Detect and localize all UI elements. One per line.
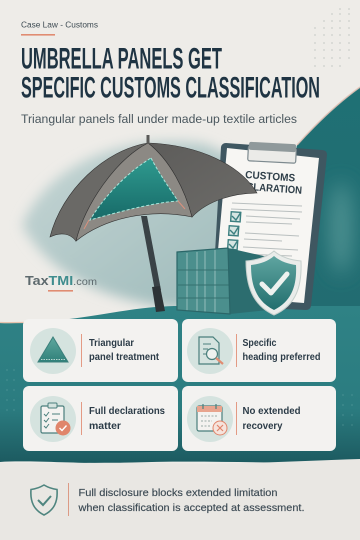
canopy middle panel	[76, 143, 192, 241]
label: Full declarations	[89, 406, 165, 417]
label: recovery	[242, 421, 283, 432]
checklist lines	[231, 203, 302, 256]
canopy right panel	[148, 143, 257, 217]
clipboard heading: DECLARATION	[233, 180, 302, 197]
panel: full declarations matter	[23, 386, 178, 451]
title	[21, 42, 320, 104]
label: matter	[89, 421, 121, 432]
panel stitching	[90, 158, 178, 220]
icon: triangle	[38, 337, 68, 362]
umbrella illustration	[50, 135, 257, 312]
subtitle: Triangular panels fall under made-up textile articles	[21, 112, 297, 126]
label: Specific	[242, 338, 277, 349]
dot pattern top right	[314, 8, 350, 67]
label: Triangular	[89, 338, 134, 349]
dots on teal	[6, 369, 353, 426]
teal wave background	[0, 87, 360, 463]
triangular teal panel	[90, 158, 178, 220]
footer callout text: Full disclosure blocks extended limitation	[78, 487, 278, 499]
icon: calendar cross	[197, 404, 227, 435]
clipboard illustration	[212, 142, 327, 310]
canopy left panel	[50, 143, 148, 241]
clipboard heading	[233, 169, 302, 197]
footer strip	[0, 459, 360, 540]
shield check	[246, 251, 301, 315]
label: No extended	[242, 406, 300, 417]
checkboxes	[228, 212, 241, 250]
label: heading preferred	[242, 352, 320, 363]
panel: triangular panel treatment	[23, 319, 178, 382]
icon: document magnifier	[199, 337, 223, 364]
accent rule	[21, 34, 55, 36]
shipping container	[177, 248, 268, 314]
logo: TaxTMI.com: TaxTMI.com	[25, 273, 97, 288]
watercolor wash behind umbrella	[22, 142, 240, 308]
umbrella pole	[141, 216, 161, 291]
clipboard heading: CUSTOMS	[245, 169, 296, 184]
panel: specific heading preferred	[182, 319, 336, 382]
panel: no extended recovery	[182, 386, 336, 451]
icon: clipboard check	[41, 403, 70, 436]
badge: case law label: Case Law - Customs	[21, 20, 98, 30]
label: panel treatment	[89, 352, 160, 363]
icon: footer shield	[31, 485, 57, 515]
footer divider	[68, 483, 69, 516]
footer callout text: when classification is accepted at assessment.	[77, 502, 305, 514]
